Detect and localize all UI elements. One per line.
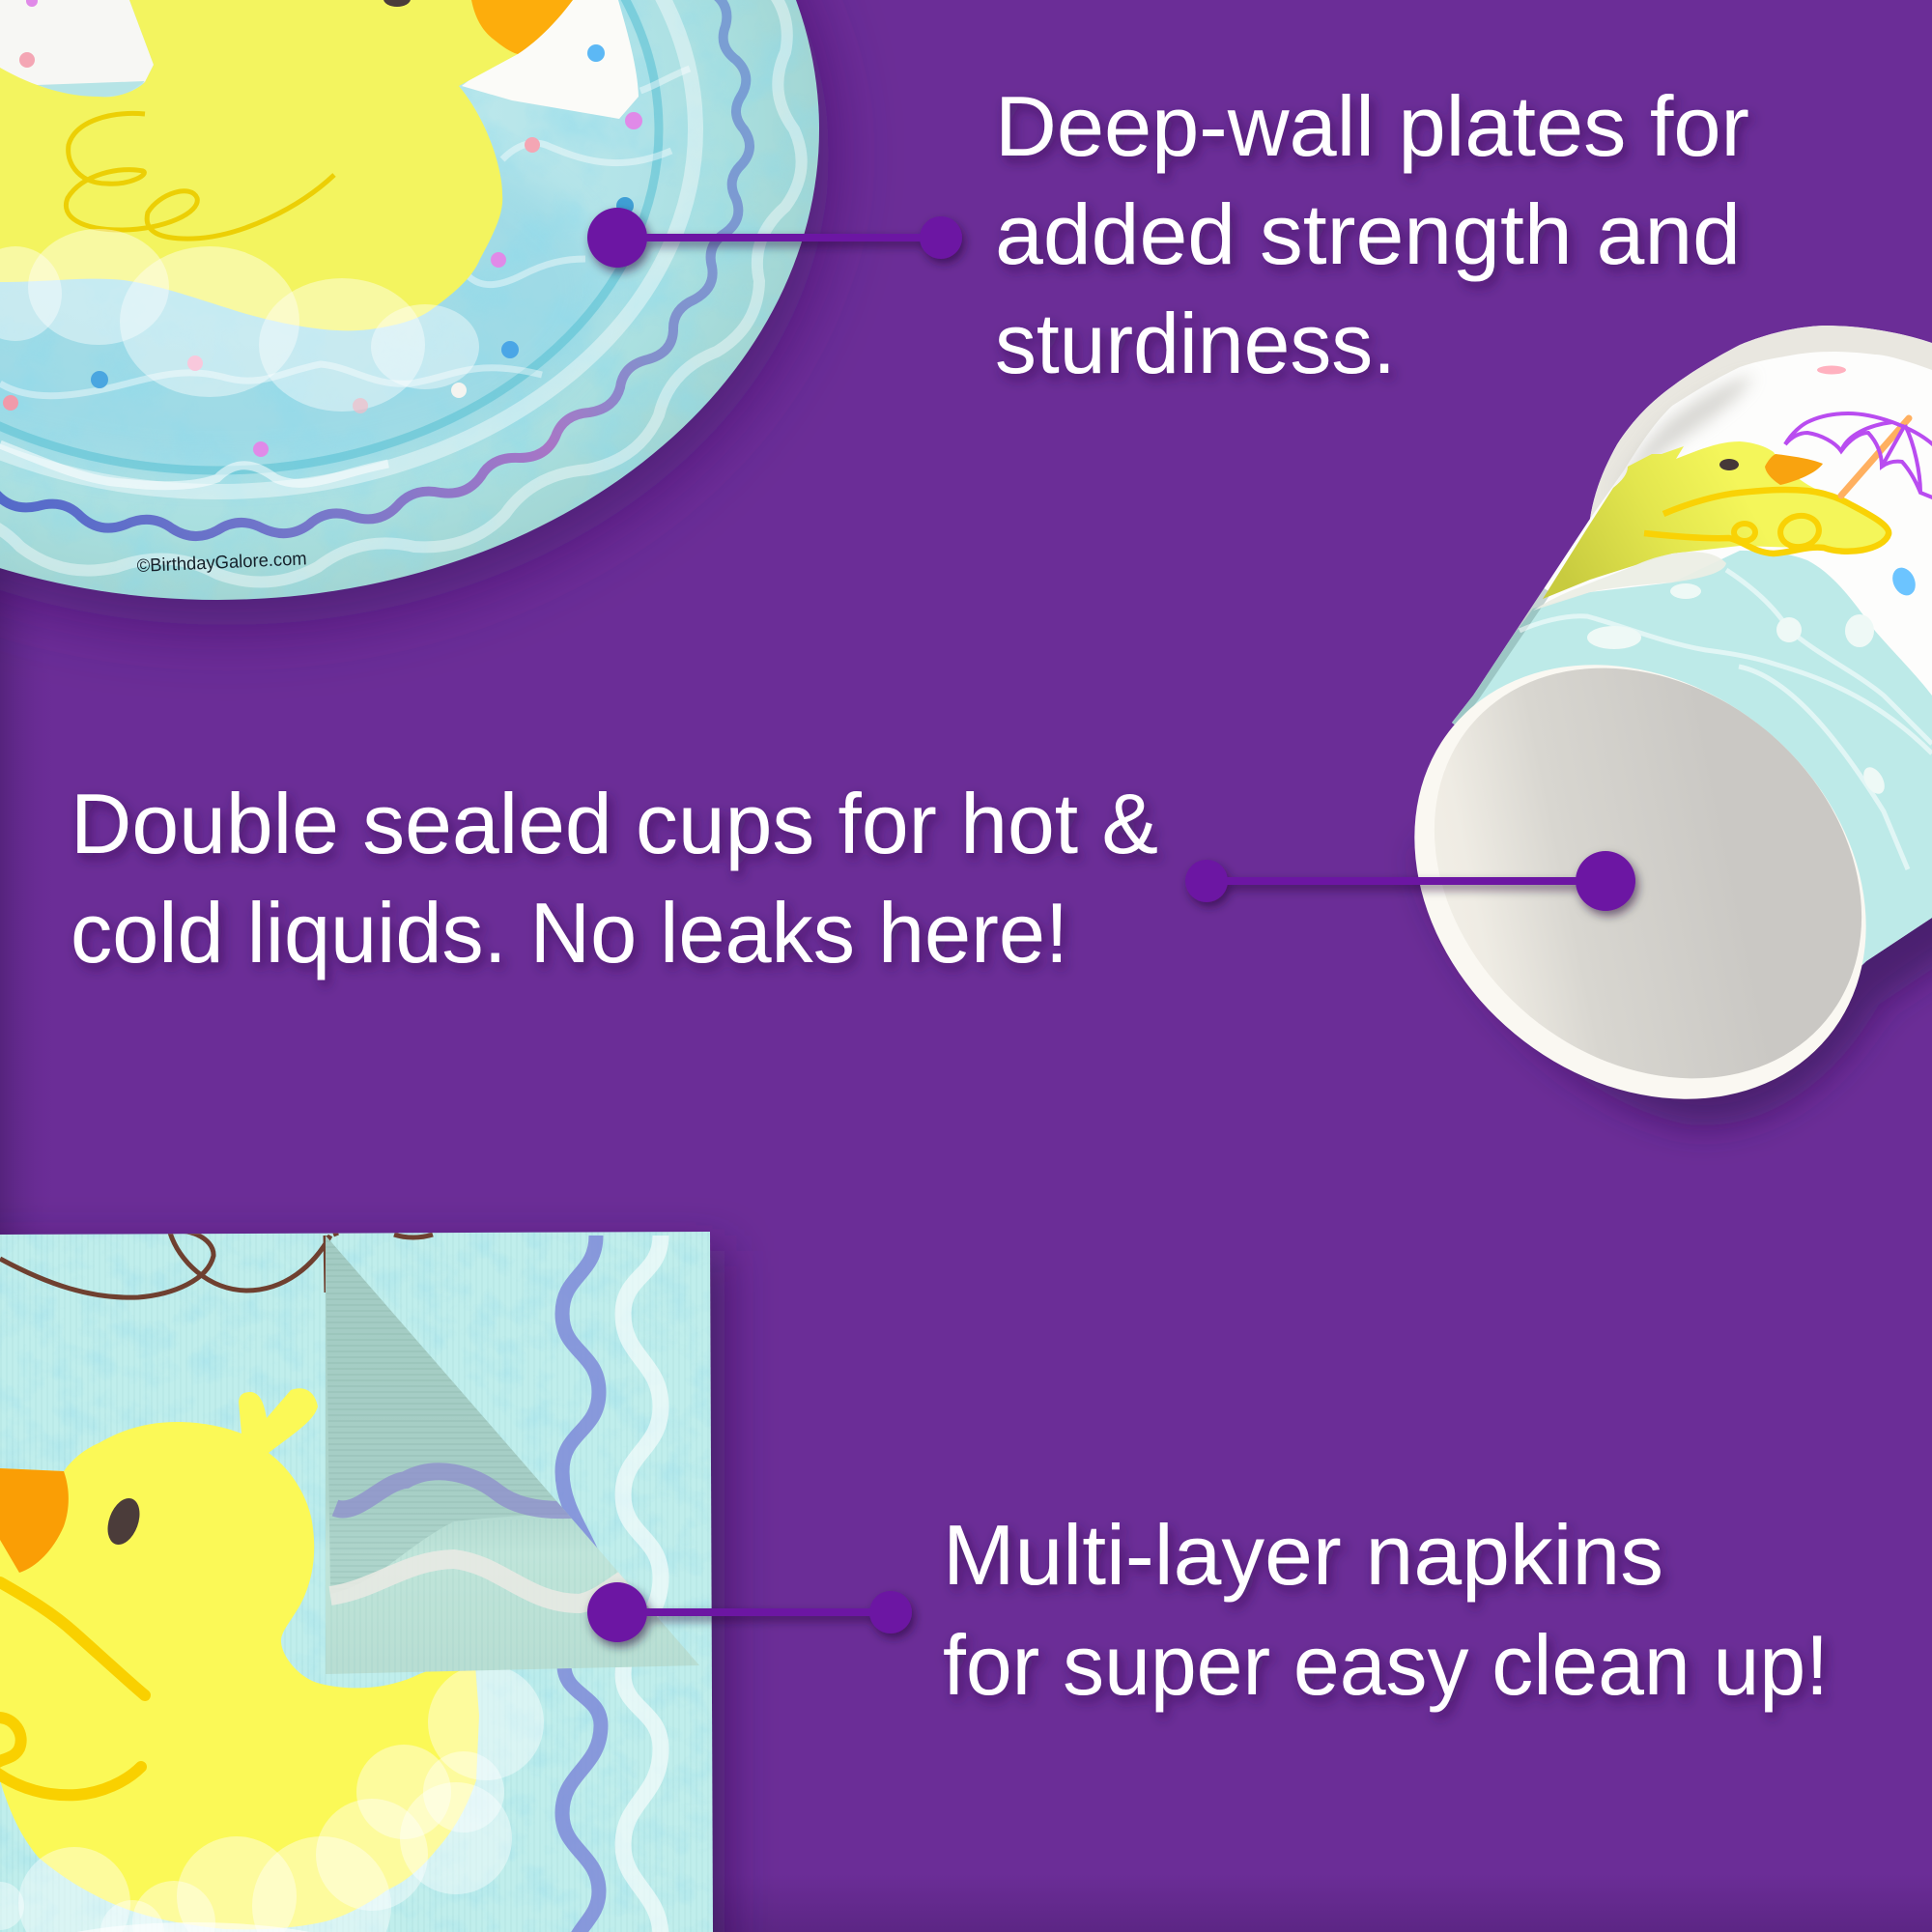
napkin bubbles <box>0 1664 544 1932</box>
text: plate feature: Deep-wall plates for <box>995 78 1749 174</box>
water waves <box>0 69 690 486</box>
napkin duck body <box>0 1388 479 1929</box>
duck body <box>0 0 518 330</box>
cup duck beak <box>1765 454 1823 485</box>
foam below duck <box>0 1922 396 1932</box>
folded corner <box>319 1227 705 1681</box>
white waves on band <box>1520 570 1932 869</box>
cup duck <box>1543 441 1889 599</box>
purple wave <box>562 1236 601 1932</box>
connector: cup callout <box>1185 851 1635 911</box>
wing curl loops <box>1734 513 1821 550</box>
confetti <box>1817 365 1846 375</box>
text: plate feature <box>995 78 1749 391</box>
cup base outer rim <box>1327 575 1932 1189</box>
inner cyan ring <box>0 0 659 470</box>
purple wavy border <box>0 0 750 536</box>
connector: napkin callout <box>587 1582 912 1642</box>
panel: paper cup product photo <box>1327 309 1932 1189</box>
cup shadow <box>1420 773 1932 1125</box>
cup foam <box>1533 552 1726 611</box>
napkin artwork <box>0 1227 720 1932</box>
text: napkin feature: Multi-layer napkins <box>943 1507 1663 1603</box>
copyright text: ©BirthdayGalore.com <box>136 549 307 577</box>
plate artwork <box>0 0 840 618</box>
duck beak <box>471 0 573 54</box>
foam dots on band <box>1587 583 1889 797</box>
shaded wall below rim <box>1608 375 1753 497</box>
plate shadow <box>0 0 829 625</box>
cup body <box>1430 309 1932 1063</box>
cup top rim <box>1590 326 1932 519</box>
text: napkin feature: for super easy clean up! <box>943 1617 1829 1713</box>
wing squiggle <box>66 113 334 239</box>
text: plate feature: sturdiness. <box>995 296 1396 391</box>
foam bubbles <box>0 229 479 412</box>
text: napkin feature <box>943 1507 1829 1713</box>
napkin duck eye <box>101 1493 146 1549</box>
cup edge shading <box>1452 589 1546 723</box>
napkin shadow <box>0 1251 724 1932</box>
white wavy border <box>0 0 802 582</box>
text: cup feature: cold liquids. No leaks here! <box>71 885 1068 980</box>
umbrella <box>1785 413 1932 498</box>
napkin duck beak <box>0 1468 69 1573</box>
white background behind duck <box>462 0 639 119</box>
wing outline <box>1644 490 1889 554</box>
cup base inner <box>1351 583 1932 1163</box>
napkin duck wing lines <box>0 1582 145 1795</box>
white ring <box>0 0 696 492</box>
cup duck eye <box>1719 459 1739 470</box>
brown loops <box>0 1231 433 1297</box>
panel: napkin product photo <box>0 1227 724 1932</box>
connector: plate callout <box>587 208 962 268</box>
confetti dots <box>3 0 642 457</box>
duck eye <box>384 0 411 7</box>
teal printed band <box>1439 551 1932 1063</box>
text: plate feature: added strength and <box>995 186 1741 282</box>
panel: paper plate product photo <box>0 0 840 625</box>
white wave <box>623 1236 661 1932</box>
text: cup feature: Double sealed cups for hot & <box>71 776 1158 871</box>
text: cup feature <box>71 776 1158 980</box>
